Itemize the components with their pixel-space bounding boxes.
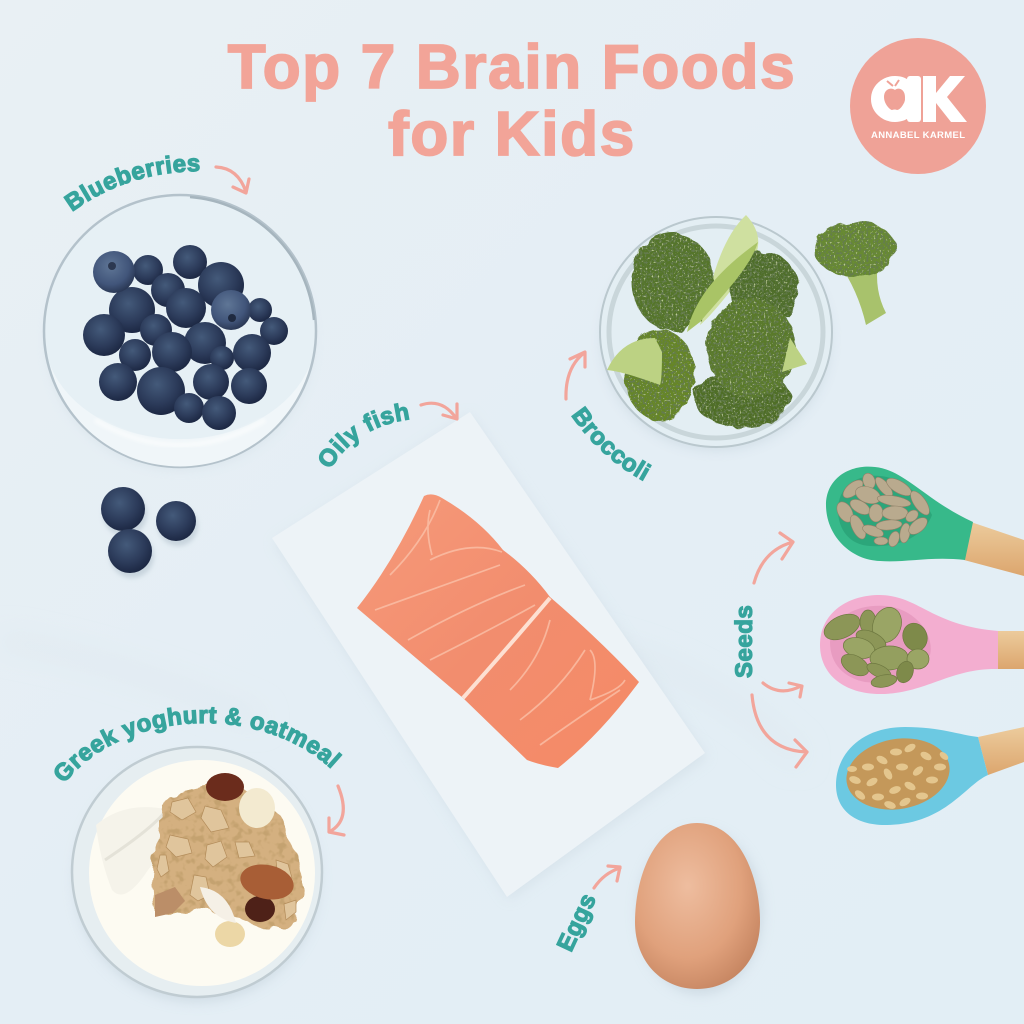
pumpkin seeds: [820, 603, 931, 689]
label: Seeds: Seeds: [731, 605, 758, 678]
blueberry bowl: [44, 195, 316, 468]
loose broccoli: [814, 221, 896, 325]
label: Eggs: Eggs: [552, 889, 602, 956]
coconut flake: [200, 887, 236, 923]
label: Oily fish: Oily fish: [318, 402, 410, 467]
arrow: seeds to blue spoon: [752, 695, 807, 767]
broccoli bowl: [600, 215, 832, 450]
title: [228, 33, 796, 169]
label: Greek yoghurt & oatmeal: Greek yoghurt & oatmeal: [54, 706, 342, 781]
egg: [635, 823, 762, 994]
banana slice: [239, 788, 275, 828]
title: for Kids: [388, 100, 636, 169]
arrow: broccoli: [566, 352, 585, 399]
flax seeds: [841, 731, 955, 817]
paper: [272, 412, 707, 900]
broccoli florets: [607, 215, 807, 428]
yoghurt bowl: [72, 747, 322, 1002]
salmon fillet: [357, 494, 639, 768]
label: Broccoli: Broccoli: [571, 406, 652, 482]
granola: [152, 780, 305, 930]
title: Top 7 Brain Foods: [228, 33, 796, 102]
sunflower seeds: [833, 471, 933, 548]
honey: [215, 921, 245, 947]
arrow: eggs: [594, 866, 620, 888]
logo: Annabel Karmel: [850, 38, 986, 174]
loose blueberries: [101, 487, 198, 578]
logo: Annabel Karmel: ANNABEL KARMEL: [871, 130, 965, 141]
arrow: seeds to pink spoon: [763, 683, 802, 697]
almond: [237, 860, 297, 904]
green spoon with sunflower seeds: [826, 467, 1024, 576]
pink spoon with pumpkin seeds: [820, 595, 1024, 694]
arrow: yoghurt: [329, 786, 344, 835]
blue spoon with flax seeds: [836, 727, 1024, 825]
arrow: oily fish: [421, 403, 457, 419]
arrow: seeds to green spoon: [754, 533, 793, 583]
label: Blueberries: Blueberries: [63, 155, 200, 212]
blueberries in bowl: [83, 245, 288, 430]
raisins: [206, 773, 244, 801]
arrow: blueberries: [216, 167, 249, 193]
